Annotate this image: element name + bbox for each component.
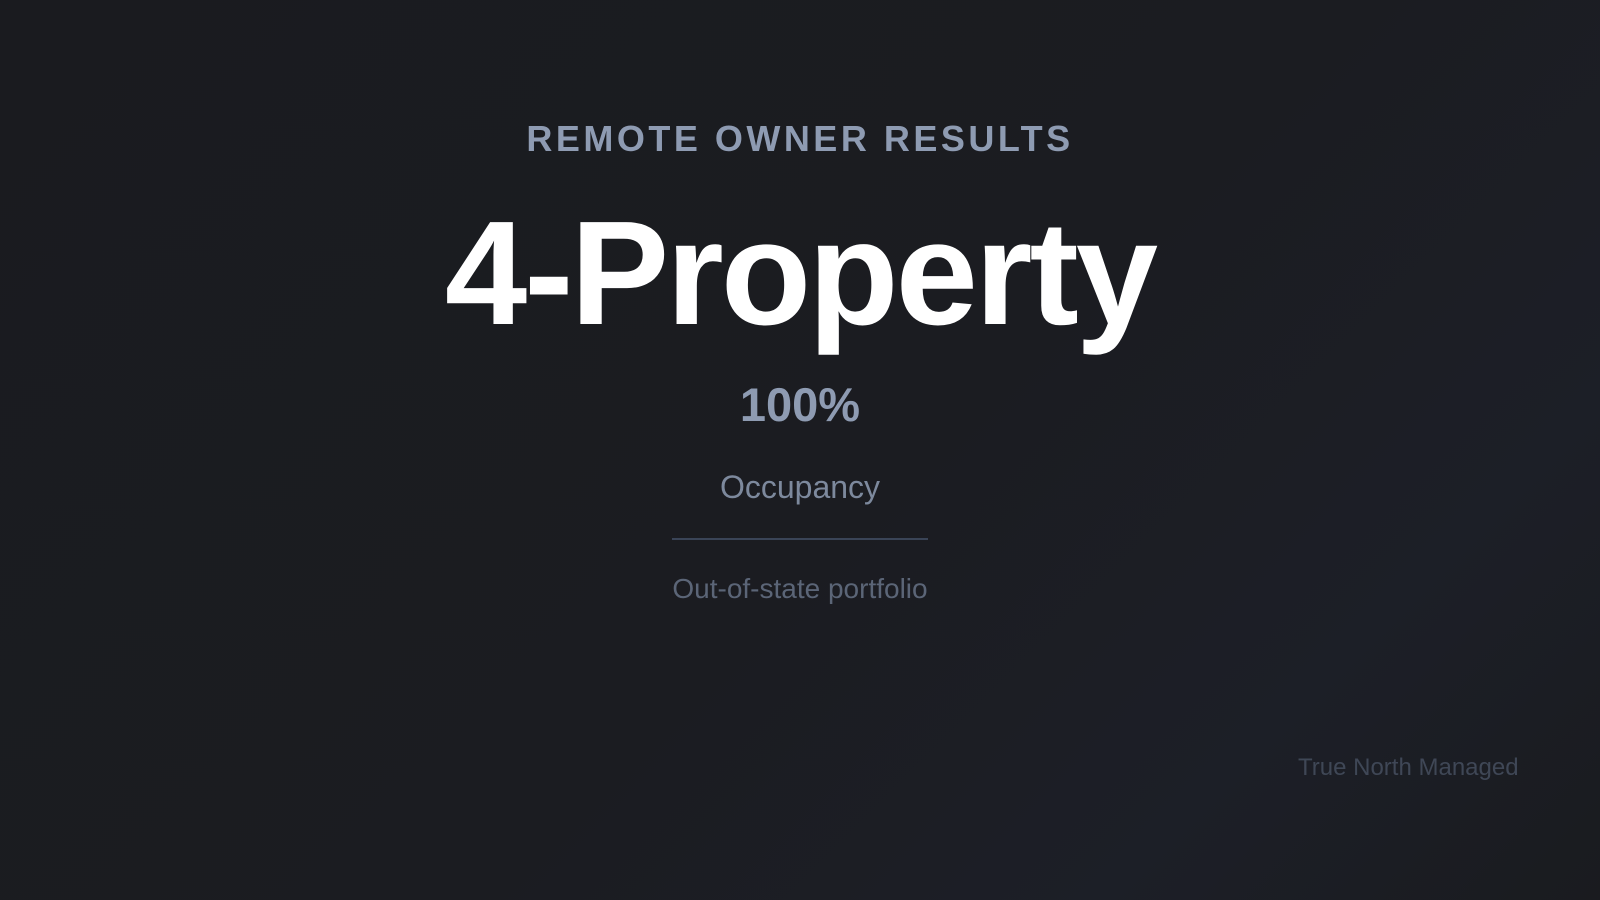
- main headline: 4-Property: [445, 191, 1155, 356]
- brand footer: True North Managed: [1298, 754, 1519, 781]
- stat value: 100%: [740, 378, 860, 431]
- subtitle: Out-of-state portfolio: [672, 573, 928, 604]
- stat label: Occupancy: [720, 469, 880, 505]
- eyebrow heading: REMOTE OWNER RESULTS: [526, 118, 1074, 159]
